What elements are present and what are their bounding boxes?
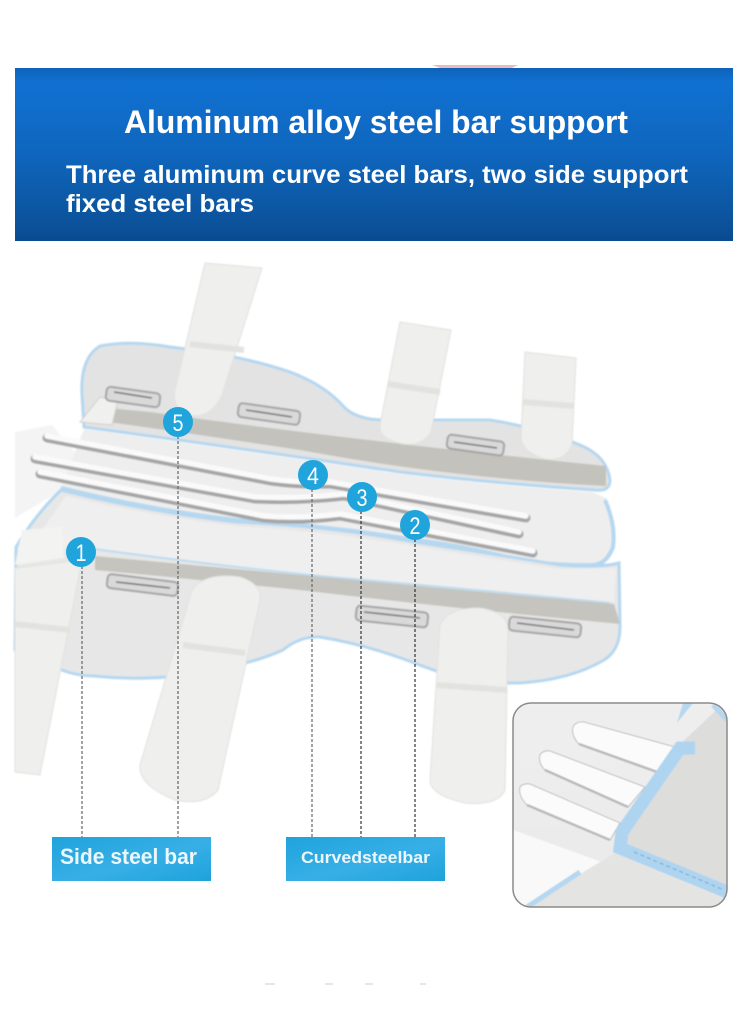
brace product illustration	[15, 263, 620, 803]
badge 4	[298, 460, 328, 490]
pocket lower trim	[61, 488, 614, 565]
subtitle: fixed steel bars	[66, 190, 254, 218]
lower fabric	[533, 862, 610, 906]
subtitle	[66, 161, 689, 218]
header banner	[15, 68, 733, 241]
white sleeve behind bars	[15, 425, 90, 518]
title: Aluminum alloy steel bar support	[124, 104, 628, 140]
upper brace panel	[82, 343, 610, 490]
label: side steel bar	[52, 837, 211, 881]
lower straps	[15, 560, 508, 803]
strap fold bands	[15, 344, 574, 690]
badge 5	[163, 407, 193, 437]
lower brace panel	[15, 490, 620, 683]
pocket fabric	[627, 708, 726, 884]
badge 1	[66, 537, 96, 567]
middle pocket panel	[61, 429, 614, 565]
velcro band lower	[95, 556, 620, 624]
badge 2: 2	[410, 513, 420, 540]
inset: close-up of bar ends	[513, 700, 727, 907]
lower buckles	[106, 574, 582, 638]
velcro band upper	[108, 408, 606, 486]
label: side steel bar: Side steel bar	[60, 844, 197, 869]
small strap fold	[15, 527, 64, 565]
pink fragment above header	[432, 65, 518, 68]
number badges	[66, 407, 430, 567]
label: curved steel bar	[286, 837, 445, 881]
dashed leader lines	[82, 436, 415, 838]
subtitle: Three aluminum curve steel bars, two side support	[66, 161, 689, 189]
badge 1: 1	[76, 540, 86, 567]
badge 3: 3	[356, 485, 368, 512]
blue trim	[620, 748, 727, 892]
badge 4: 4	[307, 463, 319, 490]
upper straps	[174, 263, 576, 459]
faint cropped text fragments at bottom	[265, 983, 426, 985]
upper buckles	[105, 386, 505, 456]
buckle slots	[114, 392, 574, 630]
badge 3	[347, 482, 377, 512]
label: curved steel bar: Curvedsteelbar	[301, 848, 430, 867]
strap fold at upper left	[80, 397, 118, 425]
steel bars	[35, 436, 533, 553]
lower panel light strip	[30, 496, 616, 602]
badge 5: 5	[172, 410, 184, 437]
close-up bars	[520, 722, 675, 840]
blue trim line on lower panel	[94, 549, 610, 603]
badge 2	[400, 510, 430, 540]
